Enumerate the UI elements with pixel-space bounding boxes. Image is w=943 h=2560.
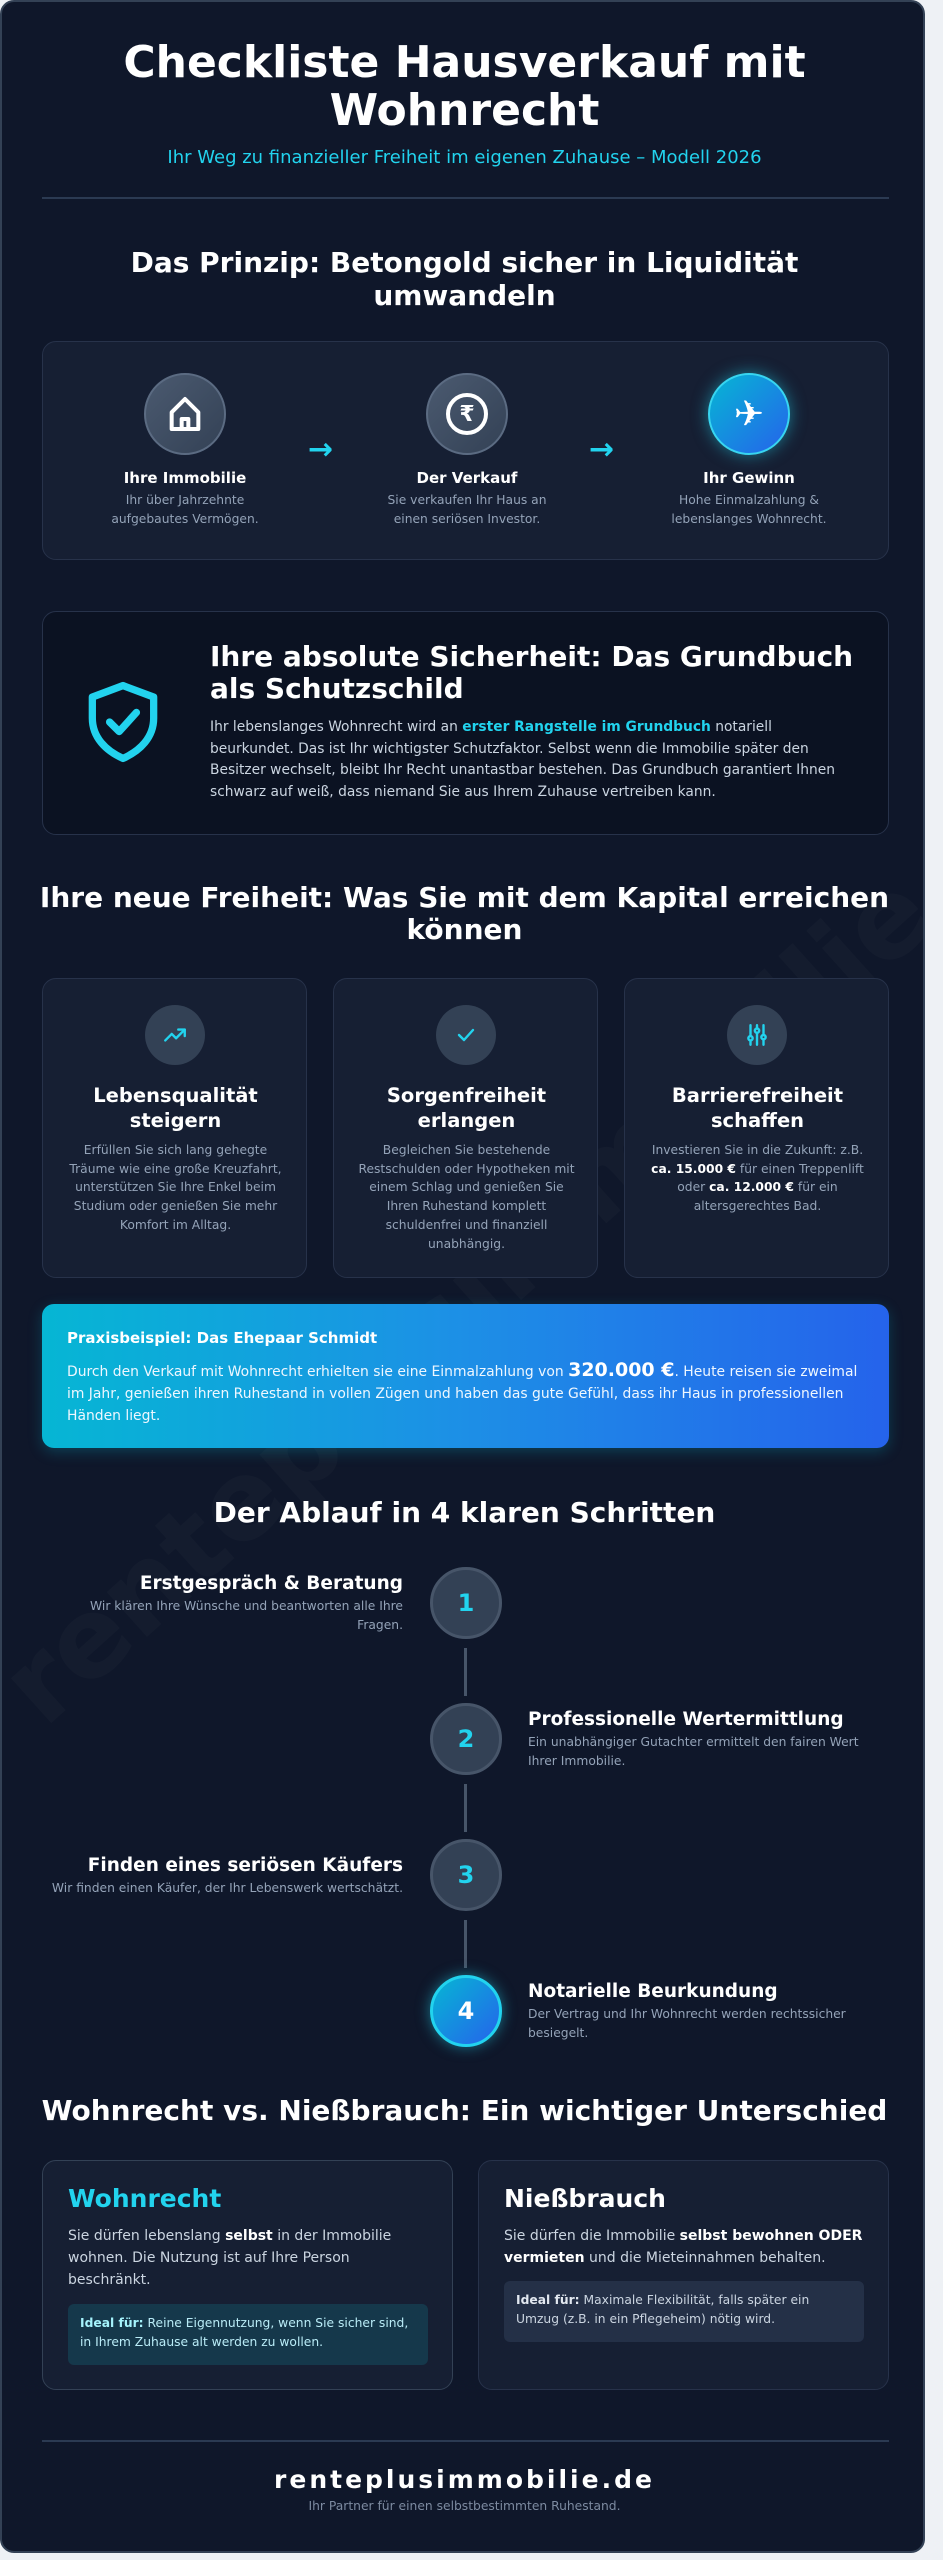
icon: currency: ₹ bbox=[459, 402, 475, 426]
card: Lebensqualität: steigern bbox=[130, 1109, 221, 1132]
panel: Prinzip flow bbox=[42, 341, 889, 560]
card: Sorgenfreiheit: Sorgenfreiheit bbox=[387, 1084, 546, 1107]
panel: Nießbrauch: Sie dürfen die Immobilie selbst bewohnen ODER vermieten und die Mieteinnahmen behalten. bbox=[504, 2228, 862, 2266]
callout: Praxisbeispiel: Praxisbeispiel: Das Ehepaar Schmidt bbox=[67, 1329, 377, 1347]
panel: Prinzip flow: einen seriösen Investor. bbox=[394, 512, 540, 526]
timeline: Wir klären Ihre Wünsche und beantworten alle Ihre Fragen. bbox=[90, 1599, 403, 1632]
timeline bbox=[52, 1567, 859, 2056]
panel: Prinzip flow: lebenslanges Wohnrecht. bbox=[671, 512, 827, 526]
heading: Freiheit bbox=[40, 881, 889, 946]
heading: Ablauf: Der Ablauf in 4 klaren Schritten bbox=[214, 1496, 715, 1529]
heading: als Schutzschild bbox=[210, 672, 464, 705]
step 3 bbox=[430, 1839, 502, 1911]
callout: Praxisbeispiel bbox=[42, 1304, 889, 1448]
timeline: Professionelle Wertermittlung bbox=[528, 1709, 844, 1730]
panel: Sicherheit bbox=[42, 611, 889, 835]
step labels: Ihre Immobilie bbox=[124, 469, 246, 487]
panel: Prinzip flow: Sie verkaufen Ihr Haus an bbox=[387, 493, 547, 507]
timeline: Der Vertrag und Ihr Wohnrecht werden rechtssicher besiegelt. bbox=[528, 2007, 846, 2040]
icon: currency bbox=[426, 373, 508, 455]
step 2 bbox=[430, 1703, 502, 1775]
callout: ideal für bbox=[504, 2281, 864, 2342]
arrows: → bbox=[308, 432, 333, 467]
panel: Wohnrecht bbox=[42, 2160, 453, 2390]
card: Barrierefreiheit: Barrierefreiheit bbox=[672, 1084, 843, 1107]
step labels: aufgebautes Vermögen. bbox=[111, 512, 259, 526]
callout: ideal für bbox=[68, 2304, 428, 2365]
panel: Prinzip flow: Ihr Gewinn bbox=[703, 469, 795, 487]
step 1: 1 bbox=[458, 1589, 474, 1617]
callout: Praxisbeispiel: Durch den Verkauf mit Wohnrecht erhielten sie eine Einmalzahlung von 320.000 €. Heute reisen sie zweimal im Jahr, genießen ihren Ruhestand in vollen Zügen und haben das gute Gefühl, dass ihr Haus in professionellen Händen liegt. bbox=[67, 1359, 857, 1424]
footer brand bbox=[274, 2465, 655, 2513]
card: Sorgenfreiheit bbox=[333, 978, 598, 1278]
card: Sorgenfreiheit: Begleichen Sie bestehende Restschulden oder Hypotheken mit einem Schlag und genießen Sie Ihren Ruhestand komplett schuldenfrei und finanziell unabhängig. bbox=[358, 1143, 575, 1251]
step 4 bbox=[430, 1975, 502, 2047]
step 3: 3 bbox=[458, 1861, 474, 1889]
panel: Prinzip flow: Hohe Einmalzahlung & bbox=[679, 493, 819, 507]
step 1 bbox=[430, 1567, 502, 1639]
card: Lebensqualität: Erfüllen Sie sich lang gehegte Träume wie eine große Kreuzfahrt, unterstützen Sie Ihre Enkel beim Studium oder genießen Sie mehr Komfort im Alltag. bbox=[69, 1143, 282, 1232]
heading: Freiheit: Ihre neue Freiheit: Was Sie mit dem Kapital erreichen bbox=[40, 881, 889, 914]
heading: Freiheit: können bbox=[407, 913, 522, 946]
heading: Das Prinzip bbox=[131, 246, 798, 312]
panel: Wohnrecht: Wohnrecht bbox=[68, 2184, 221, 2213]
panel: Wohnrecht: Sie dürfen lebenslang selbst in der Immobilie wohnen. Die Nutzung ist auf Ihre Person beschränkt. bbox=[68, 2228, 391, 2288]
heading: Wohnrecht vs Nießbrauch: Wohnrecht vs. Nießbrauch: Ein wichtiger Unterschied bbox=[42, 2094, 887, 2127]
icon: house bbox=[144, 373, 226, 455]
title bbox=[123, 37, 806, 136]
step 2: 2 bbox=[458, 1725, 474, 1753]
heading bbox=[210, 640, 853, 705]
footer brand: Ihr Partner für einen selbstbestimmten Ruhestand. bbox=[308, 2499, 620, 2513]
panel: Nießbrauch: Nießbrauch bbox=[504, 2184, 666, 2213]
card: Lebensqualität bbox=[42, 978, 307, 1278]
heading: Das Prinzip: Das Prinzip: Betongold sicher in Liquidität bbox=[131, 246, 798, 279]
icon: shield bbox=[88, 682, 158, 762]
card: Barrierefreiheit bbox=[624, 978, 889, 1278]
timeline: Erstgespräch & Beratung bbox=[140, 1573, 403, 1594]
heading: Das Prinzip: umwandeln bbox=[373, 279, 556, 312]
timeline: Notarielle Beurkundung bbox=[528, 1981, 778, 2002]
timeline: Ein unabhängiger Gutachter ermittelt den fairen Wert Ihrer Immobilie. bbox=[528, 1735, 859, 1768]
title: Wohnrecht bbox=[330, 85, 599, 136]
panel: Prinzip flow: Der Verkauf bbox=[417, 469, 517, 487]
step labels: Ihr über Jahrzehnte bbox=[126, 493, 244, 507]
timeline: Wir finden einen Käufer, der Ihr Lebenswerk wertschätzt. bbox=[52, 1881, 403, 1895]
card: Lebensqualität: Lebensqualität bbox=[93, 1084, 258, 1107]
step 4: 4 bbox=[458, 1997, 474, 2025]
callout: ideal für: Ideal für: Reine Eigennutzung, wenn Sie sicher sind, in Ihrem Zuhause alt werden zu wollen. bbox=[80, 2316, 408, 2349]
card: Barrierefreiheit: Investieren Sie in die Zukunft: z.B. ca. 15.000 € für einen Treppenlift oder ca. 12.000 € für ein altersgerechtes Bad. bbox=[651, 1143, 864, 1213]
step labels bbox=[111, 469, 259, 526]
panel: Prinzip flow: → bbox=[589, 432, 614, 467]
body: Ihr lebenslanges Wohnrecht wird an erster Rangstelle im Grundbuch notariell beurkundet. Das ist Ihr wichtigster Schutzfaktor. Selbst wenn die Immobilie später den Besitzer wechselt, bleibt Ihr Recht unantastbar bestehen. Das Grundbuch garantiert Ihnen schwarz auf weiß, dass niemand Sie aus Ihrem Zuhause vertreiben kann. bbox=[210, 719, 835, 800]
callout: ideal für: Ideal für: Maximale Flexibilität, falls später ein Umzug (z.B. in ein Pflegeheim) nötig wird. bbox=[516, 2293, 809, 2326]
title: Checkliste Hausverkauf mit bbox=[123, 37, 806, 88]
heading: Ihre absolute Sicherheit: Das Grundbuch bbox=[210, 640, 853, 673]
card: Barrierefreiheit: schaffen bbox=[711, 1109, 804, 1132]
icon: plane bbox=[708, 373, 790, 455]
subtitle: Ihr Weg zu finanzieller Freiheit im eigenen Zuhause – Modell 2026 bbox=[167, 147, 762, 168]
icon: plane: ✈ bbox=[734, 394, 764, 434]
card: Sorgenfreiheit: erlangen bbox=[418, 1109, 515, 1132]
panel: Nießbrauch bbox=[478, 2160, 889, 2390]
timeline: Finden eines seriösen Käufers bbox=[88, 1855, 403, 1876]
footer brand: renteplusimmobilie.de bbox=[274, 2465, 655, 2494]
